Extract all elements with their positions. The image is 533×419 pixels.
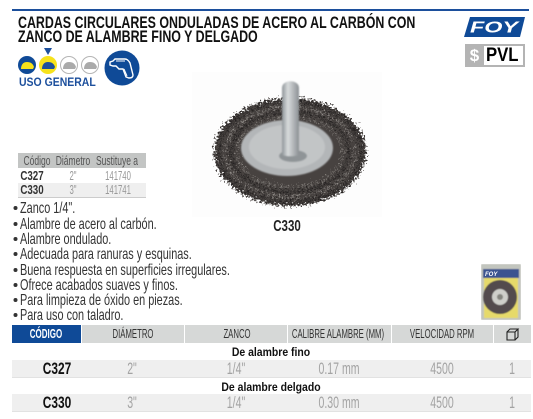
product label: C330 bbox=[273, 218, 301, 235]
header cell: diámetro: DIÁMETRO bbox=[113, 327, 153, 341]
row C330: 4500 bbox=[430, 393, 454, 412]
title: ZANCO DE ALAMBRE FINO Y DELGADO bbox=[18, 27, 258, 46]
feature list bbox=[14, 200, 230, 324]
section heading: fine wire: De alambre fino bbox=[232, 345, 310, 359]
badge: PVL price: PVL bbox=[486, 45, 519, 66]
usage level indicator bbox=[18, 48, 99, 89]
row C327: 1 bbox=[509, 359, 515, 378]
row C327: 1/4" bbox=[227, 359, 245, 378]
row C330: C330 bbox=[20, 183, 44, 197]
usage level indicator: USO GENERAL bbox=[19, 77, 96, 89]
header cell: diámetro bbox=[82, 325, 184, 343]
header cell: calibre: CALIBRE ALAMBRE (MM) bbox=[292, 327, 384, 341]
feature list: Para uso con taladro. bbox=[20, 307, 123, 324]
row C330 bbox=[12, 394, 531, 412]
brand logo: FOY bbox=[464, 17, 525, 37]
feature list: Alambre ondulado. bbox=[20, 231, 111, 248]
icon: blue helmet bbox=[18, 56, 36, 74]
row C327 bbox=[12, 360, 531, 378]
row C330: 3" bbox=[127, 393, 137, 412]
row C330: 141741 bbox=[105, 183, 131, 197]
row C327: C327 bbox=[20, 169, 44, 183]
row C327: 141740 bbox=[105, 169, 131, 183]
icon: drill bbox=[104, 50, 140, 86]
feature list: Para limpieza de óxido en piezas. bbox=[20, 292, 183, 309]
feature list: Buena respuesta en superficies irregulares. bbox=[20, 262, 230, 279]
header cell: código: CÓDIGO bbox=[30, 327, 62, 341]
badge: PVL price: $ bbox=[470, 46, 479, 65]
package photo bbox=[481, 264, 521, 320]
substitution table bbox=[18, 153, 146, 198]
header cell: package icon bbox=[494, 325, 531, 343]
row C330: C330 bbox=[43, 393, 71, 412]
table header bbox=[18, 153, 146, 168]
specifications table bbox=[12, 325, 531, 412]
row C327: 0.17 mm bbox=[318, 359, 360, 378]
icon: yellow helmet bbox=[39, 56, 57, 74]
badge: PVL price bbox=[465, 44, 525, 67]
row C327: 2" bbox=[127, 359, 137, 378]
header cell: zanco bbox=[185, 325, 287, 343]
row C330: 0.30 mm bbox=[318, 393, 360, 412]
header cell: velocidad bbox=[392, 325, 493, 343]
icon: grey helmet bbox=[60, 56, 78, 74]
header cell: zanco: ZANCO bbox=[223, 327, 251, 341]
title: CARDAS CIRCULARES ONDULADAS DE ACERO AL CARBÓN CON bbox=[18, 13, 415, 32]
row C330: 1/4" bbox=[227, 393, 245, 412]
icon: selection arrow bbox=[44, 48, 52, 55]
row C327: 2" bbox=[69, 169, 77, 183]
feature list: Alambre de acero al carbón. bbox=[20, 216, 157, 233]
feature list: Adecuada para ranuras y esquinas. bbox=[20, 246, 192, 263]
header cell: velocidad: VELOCIDAD RPM bbox=[410, 327, 474, 341]
row C330: 1 bbox=[509, 393, 515, 412]
title bbox=[18, 13, 415, 46]
table header: Código bbox=[24, 154, 50, 168]
table header: Diámetro bbox=[56, 154, 90, 168]
icon: grey helmet bbox=[82, 56, 98, 74]
row C330: 3" bbox=[69, 183, 77, 197]
section heading: thin wire: De alambre delgado bbox=[221, 380, 321, 394]
feature list: Zanco 1/4". bbox=[20, 200, 75, 217]
package photo: FOY bbox=[485, 272, 498, 278]
row C327: C327 bbox=[43, 359, 71, 378]
feature list: Ofrece acabados suaves y finos. bbox=[20, 277, 178, 294]
product photo: wire brush bbox=[192, 72, 382, 217]
top rule bbox=[12, 9, 529, 11]
row C327: 4500 bbox=[430, 359, 454, 378]
row C330 bbox=[18, 183, 146, 197]
brand logo: FOY: FOY bbox=[470, 20, 520, 36]
table header: Sustituye a bbox=[96, 154, 138, 168]
header cell: calibre bbox=[288, 325, 391, 343]
row C327 bbox=[18, 168, 146, 183]
table header bbox=[12, 325, 531, 343]
header cell: código bbox=[12, 325, 81, 343]
